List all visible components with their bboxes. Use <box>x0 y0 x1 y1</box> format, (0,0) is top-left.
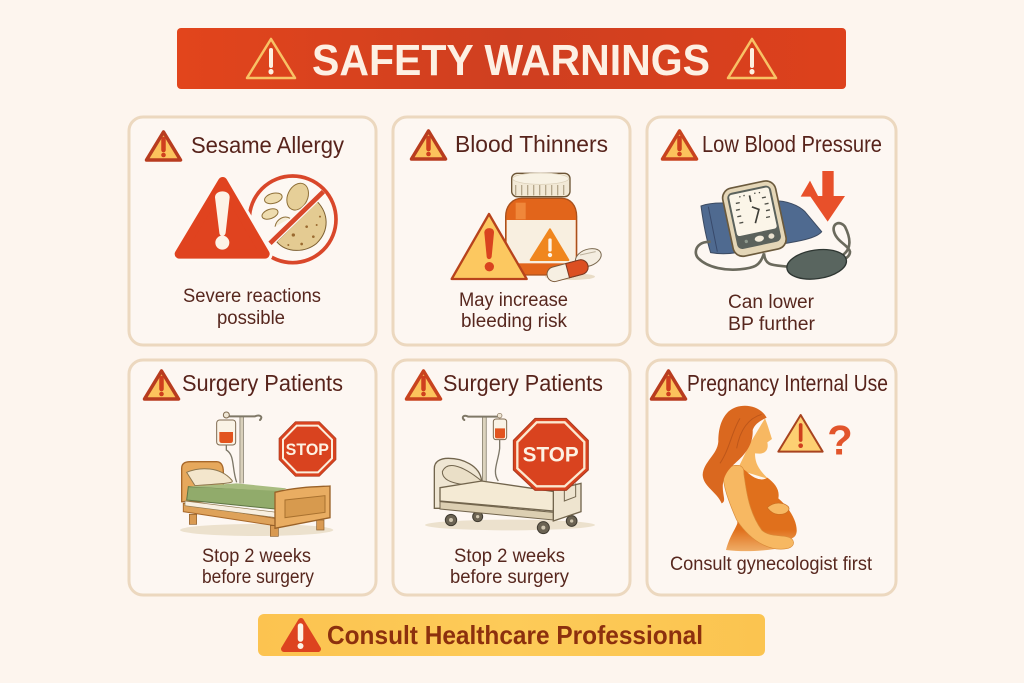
panel: sesame allergy <box>129 117 376 345</box>
panel: blood thinners <box>393 117 630 345</box>
body text: bleeding risk <box>461 311 567 332</box>
illustration: pregnant woman with warning and question mark: ? <box>827 416 853 463</box>
body text: Stop 2 weeks <box>202 546 311 567</box>
body text <box>202 546 314 588</box>
panel: surgery patients, wooden bed <box>129 360 376 595</box>
footer text: Consult Healthcare Professional <box>327 620 703 650</box>
body text: May increase <box>459 290 568 311</box>
panel: low blood pressure <box>647 117 896 345</box>
heading: Blood Thinners <box>455 131 608 157</box>
title text: SAFETY WARNINGS <box>312 36 710 85</box>
icon: small warning triangle <box>146 132 180 160</box>
heading: Low Blood Pressure <box>702 131 882 157</box>
illustration: hospital bed on wheels, IV and large stop sign: STOP <box>523 443 579 467</box>
illustration: warning and crossed sesame seeds <box>179 176 336 263</box>
icon: left title warning triangle <box>247 39 295 78</box>
heading: Surgery Patients <box>443 370 603 396</box>
body text: BP further <box>728 314 816 335</box>
illustration: hospital bed, IV and stop sign <box>180 412 336 536</box>
icon: small warning triangle <box>412 131 446 159</box>
illustration: pregnant woman with warning and question mark <box>703 406 853 551</box>
body text: Can lower <box>728 292 815 313</box>
body text: before surgery <box>450 567 569 588</box>
heading: Pregnancy Internal Use <box>687 370 888 396</box>
icon: small warning triangle <box>652 371 686 399</box>
illustration: hospital bed, IV and stop sign: STOP <box>286 440 329 459</box>
panel: surgery patients, white bed <box>393 360 630 595</box>
body text <box>728 292 816 335</box>
title banner <box>177 28 846 89</box>
body text <box>450 546 569 588</box>
illustration: hospital bed on wheels, IV and large stop sign <box>425 413 595 534</box>
body text: possible <box>217 308 285 329</box>
icon: right title warning triangle <box>728 39 776 78</box>
heading: Sesame Allergy <box>191 132 344 158</box>
body text <box>459 290 568 332</box>
illustration: blood pressure monitor and down arrow <box>696 171 850 283</box>
body text: Consult gynecologist first <box>670 554 873 575</box>
icon: small warning triangle <box>406 371 440 399</box>
panel: pregnancy internal use <box>647 360 896 595</box>
heading: Surgery Patients <box>182 370 343 396</box>
icon: footer warning triangle <box>284 621 318 649</box>
body text <box>183 286 321 329</box>
body text: Stop 2 weeks <box>454 546 565 567</box>
footer banner <box>258 614 765 656</box>
icon: small warning triangle <box>662 131 696 159</box>
icon: small warning triangle <box>144 371 178 399</box>
illustration: medicine bottle, pills and warning <box>452 173 604 283</box>
body text: Severe reactions <box>183 286 321 307</box>
body text: before surgery <box>202 567 314 588</box>
